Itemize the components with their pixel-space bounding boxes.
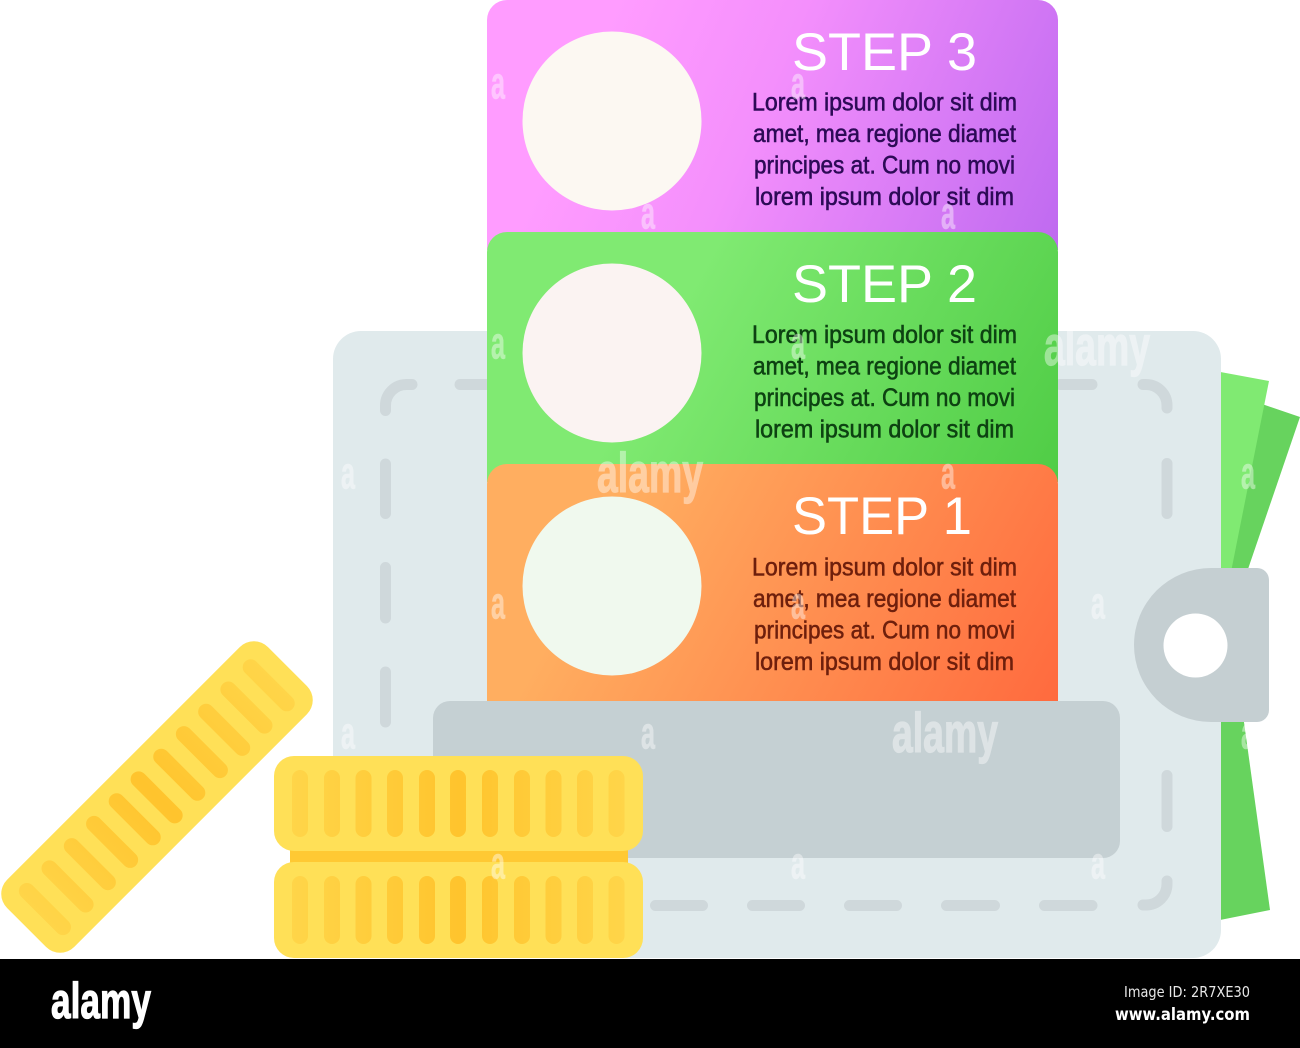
step 2 circle [522,264,702,442]
step 1 heading: STEP 1 [792,487,972,546]
top coin [274,756,643,851]
wallet pocket [433,701,1120,858]
image id: Image ID: 2R7XE30 [1124,983,1250,1001]
watermarks: a [791,578,806,628]
banknotes behind wallet [1215,371,1300,921]
step 2 text [752,321,1017,444]
bottom coin [274,862,643,958]
step 2 text: amet, mea regione diamet [753,352,1016,380]
watermarks: a [1091,578,1106,628]
watermarks: a [341,708,356,758]
step 3 text [752,88,1017,211]
watermarks: a [641,188,656,238]
panel: step 1 [487,464,1058,702]
step 3 text: principes at. Cum no movi [754,152,1015,180]
watermarks: a [1241,448,1256,498]
watermarks: a [491,838,506,888]
watermarks: a [491,318,506,368]
watermarks: a [491,58,506,108]
panel: step 2 [487,232,1058,482]
panel: step 3 [487,0,1058,250]
watermarks: alamy [892,701,998,764]
watermarks: a [791,838,806,888]
watermarks: a [491,578,506,628]
watermarks: a [341,448,356,498]
wallet clasp [1134,568,1269,722]
step 2 text: Lorem ipsum dolor sit dim [752,321,1017,349]
step 3 text: Lorem ipsum dolor sit dim [752,88,1017,116]
step 3 circle [522,32,702,210]
step 2 text: principes at. Cum no movi [754,384,1015,412]
watermarks [341,58,1256,888]
step 2 heading: STEP 2 [792,255,977,314]
step 1 text: principes at. Cum no movi [754,616,1015,644]
footer logo: alamy [51,973,151,1029]
icon: tilted coin [0,633,321,961]
watermarks: a [791,318,806,368]
step 3 text: amet, mea regione diamet [753,120,1016,148]
clasp button hole [1164,614,1228,678]
step 2 text: lorem ipsum dolor sit dim [755,416,1014,444]
wallet stitching [385,384,1167,906]
step 3 heading: STEP 3 [792,23,977,82]
step 1 text: lorem ipsum dolor sit dim [755,648,1014,676]
watermarks: alamy [1044,314,1150,377]
watermarks: a [941,448,956,498]
watermarks: a [791,58,806,108]
coin band [290,848,628,865]
footer bar [0,959,1300,1048]
watermarks: alamy [597,441,703,504]
icon: coin stack [274,756,643,958]
step 1 text [752,554,1017,676]
site url: www.alamy.com [1115,1005,1250,1025]
step 1 circle [522,496,702,676]
watermarks: a [641,708,656,758]
step 3 text: lorem ipsum dolor sit dim [755,183,1014,211]
step 1 text: Lorem ipsum dolor sit dim [752,554,1017,582]
step 1 text: amet, mea regione diamet [753,585,1016,613]
watermarks: a [1091,838,1106,888]
watermarks: a [941,188,956,238]
watermarks: a [1241,708,1256,758]
wallet body [333,331,1221,958]
